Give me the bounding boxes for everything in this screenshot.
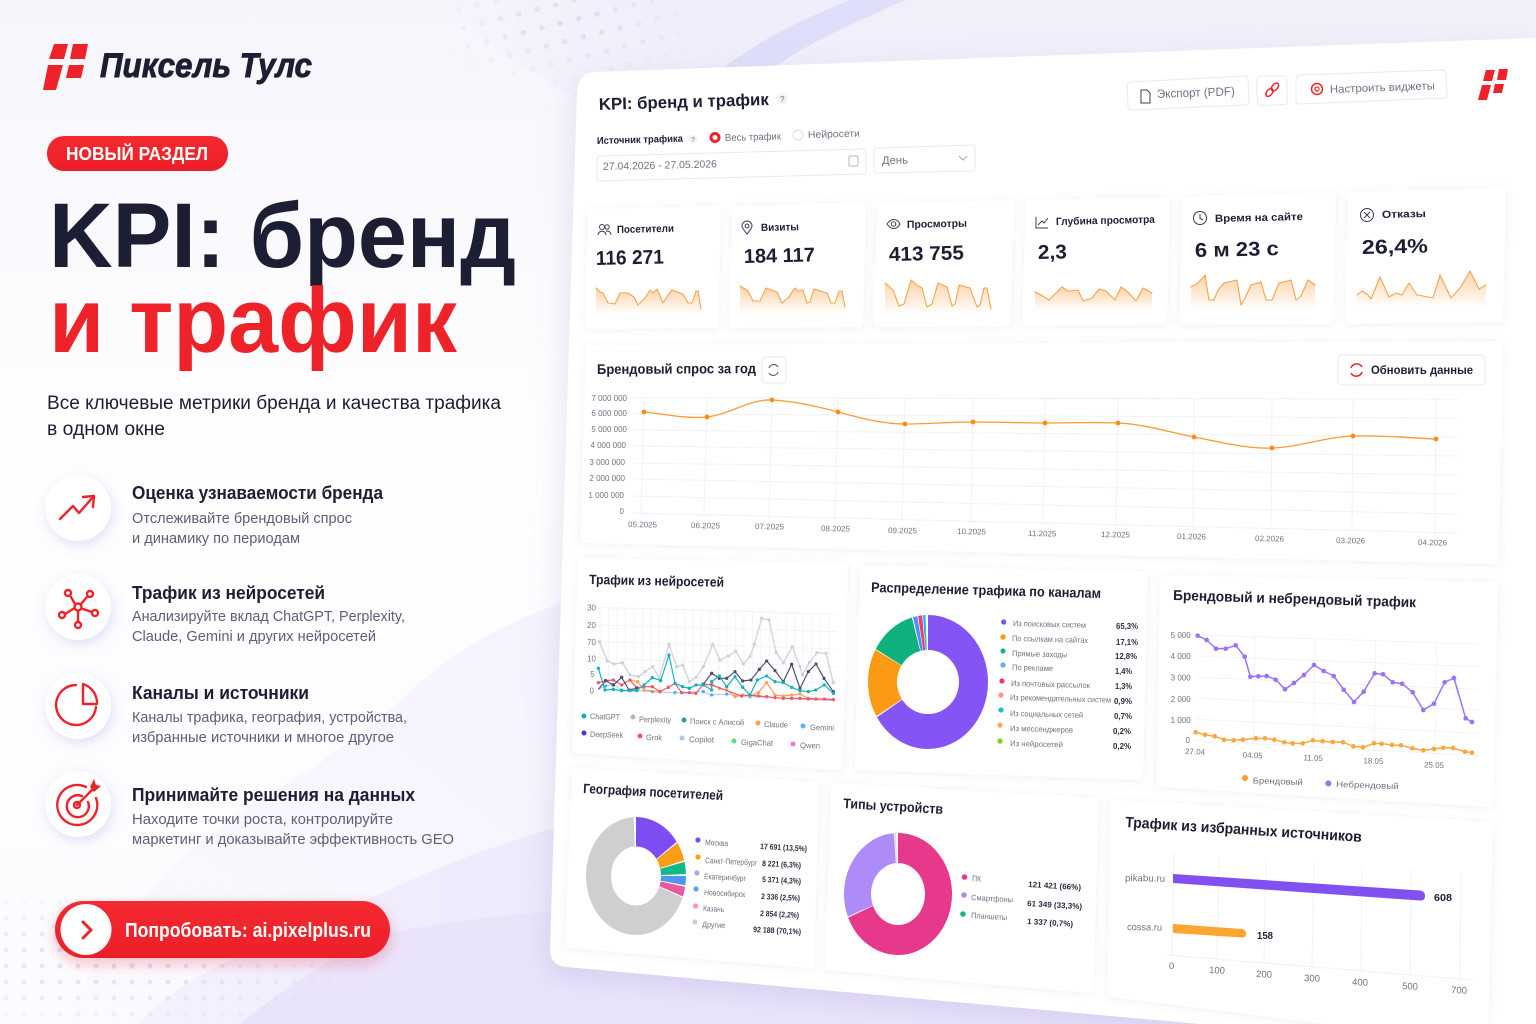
line chart: 1 000 000 (588, 491, 625, 500)
heading: Трафик из нейросетей (589, 572, 724, 590)
heading: География посетителей (583, 781, 723, 803)
legend: Copilot (689, 735, 715, 745)
bar chart: 700 (1451, 985, 1467, 997)
legend: Из мессенджеров (1010, 724, 1073, 735)
line chart: 6 000 000 (591, 409, 628, 418)
traffic source filters (597, 129, 975, 181)
KPI: visitors: 116 271 (596, 246, 664, 270)
line chart: 09.2025 (888, 526, 918, 536)
line chart: 04.05 (1243, 751, 1263, 760)
KPI: visitors (589, 210, 717, 325)
feature: brand awareness: Отслеживайте брендовый спрос (132, 510, 352, 527)
KPI: pageviews (877, 204, 1010, 323)
legend: Claude (764, 720, 789, 730)
KPI: bounces: 26,4% (1362, 236, 1428, 259)
line chart: 07.2025 (755, 522, 785, 532)
bar chart: 200 (1256, 969, 1272, 981)
line chart: 1 000 (1171, 716, 1191, 725)
KPI: view depth (1026, 201, 1166, 322)
line chart: 10 (587, 654, 597, 663)
icon: pie chart (45, 673, 111, 739)
title: и трафик (49, 270, 458, 372)
KPI: visitors: Посетители (617, 223, 674, 236)
panel: AI traffic (576, 562, 844, 766)
line chart: 0 (590, 686, 595, 695)
help icon: ? (780, 95, 785, 104)
bar chart: 400 (1352, 977, 1368, 989)
feature: AI traffic: Трафик из нейросетей (132, 583, 325, 603)
legend: 17,1% (1116, 638, 1138, 647)
line chart: 5 000 (1171, 631, 1191, 640)
legend: Из социальных сетей (1010, 709, 1083, 720)
line chart: 0 (620, 507, 625, 516)
traffic source filters: Источник трафика (597, 133, 683, 147)
line chart: 4 000 000 (590, 441, 627, 450)
feature: channels: избранные источники и многое другое (132, 729, 394, 746)
button: update data: Обновить данные (1371, 365, 1473, 377)
period select (874, 145, 975, 173)
bar chart: pikabu.ru (1125, 873, 1165, 885)
button: export: Экспорт (PDF) (1157, 84, 1235, 101)
line chart (1171, 631, 1479, 791)
icon: people (598, 224, 611, 235)
KPI: visits: 184 117 (744, 244, 815, 268)
sparkline (885, 280, 991, 314)
legend: Новосибирск (704, 888, 746, 899)
line chart: Брендовый (1253, 775, 1303, 787)
icon: eye (887, 220, 900, 228)
heading: Брендовый и небрендовый трафик (1173, 588, 1417, 611)
legend: Qwen (800, 741, 820, 750)
legend: Москва (705, 838, 729, 848)
icon: logo mark (43, 44, 88, 90)
legend: Смартфоны (971, 893, 1014, 905)
bar chart (1125, 853, 1473, 997)
bar chart: 500 (1402, 981, 1418, 993)
title (49, 185, 516, 372)
dashboard heading: KPI: бренд и трафик (599, 90, 770, 114)
legend: 92 188 (70,1%) (753, 925, 802, 936)
legend: ChatGPT (590, 712, 620, 722)
bar: cossa.ru (1173, 924, 1246, 938)
bar: pikabu.ru (1173, 874, 1425, 901)
KPI: pageviews: Просмотры (907, 218, 967, 231)
feature: data decisions: Принимайте решения на данных (132, 785, 415, 805)
donut chart (897, 648, 959, 716)
legend: 1,4% (1115, 667, 1132, 676)
legend: 12,8% (1115, 652, 1137, 661)
legend: GigaChat (741, 738, 774, 748)
KPI: bounces (1349, 192, 1502, 320)
sparkline (1191, 275, 1315, 310)
line chart: 3 000 (1171, 674, 1191, 683)
bar chart: 0 (1169, 961, 1174, 972)
line chart: 2 000 (1171, 695, 1191, 704)
KPI: view depth: 2,3 (1038, 241, 1067, 264)
icon: network (45, 574, 111, 640)
icon: pin (742, 221, 752, 234)
legend: Екатеринбург (704, 872, 746, 883)
logo (43, 44, 312, 90)
date range (597, 149, 866, 181)
line chart: 5 (590, 670, 595, 679)
line chart: 08.2025 (821, 524, 851, 534)
line chart: 12.2025 (1101, 530, 1131, 540)
icon: cross circle (1360, 208, 1374, 222)
KPI: visits (733, 207, 862, 324)
icon: trend arrow (45, 475, 111, 541)
legend: 0,2% (1113, 727, 1131, 736)
line chart: 70 (587, 638, 597, 647)
legend: Perplexity (639, 715, 671, 725)
icon: target (45, 771, 111, 837)
line chart: 05.2025 (628, 520, 658, 530)
heading: Брендовый спрос за год (597, 360, 756, 377)
button: link (1257, 75, 1288, 106)
legend: 2 336 (2,5%) (761, 892, 801, 903)
line chart (588, 394, 1458, 548)
legend: Прямые заходы (1012, 649, 1067, 659)
KPI: view depth: Глубина просмотра (1056, 214, 1155, 228)
button: export (1127, 76, 1249, 110)
feature: data decisions: Находите точки роста, контролируйте (132, 811, 393, 828)
feature: AI traffic: Анализируйте вклад ChatGPT, Perplexity, (132, 608, 405, 625)
legend: 0,7% (1114, 712, 1132, 721)
legend: ПК (972, 874, 982, 884)
legend (692, 837, 808, 936)
legend: 121 421 (66%) (1028, 880, 1082, 892)
button: try: Попробовать: ai.pixelplus.ru (125, 920, 371, 942)
line chart: 25.05 (1424, 760, 1445, 770)
traffic source filters: ? (691, 137, 695, 144)
button: update data (1338, 355, 1485, 385)
date range: 27.04.2026 - 27.05.2026 (603, 158, 717, 173)
heading: Распределение трафика по каналам (871, 579, 1101, 601)
button: configure widgets (1296, 70, 1447, 104)
legend: Из рекомендательных систем (1010, 693, 1111, 705)
line chart: 3 000 000 (589, 458, 626, 467)
legend: 2 854 (2,2%) (760, 909, 800, 920)
KPI: visits: Визиты (761, 221, 799, 234)
KPI: time on site: 6 м 23 с (1195, 238, 1279, 262)
legend: Gemini (810, 723, 834, 733)
legend: Казань (703, 904, 724, 914)
legend (582, 712, 834, 750)
legend: 0,2% (1113, 742, 1131, 751)
dashboard header (599, 69, 1508, 114)
line chart: 4 000 (1171, 652, 1191, 661)
legend: Поиск с Алисой (690, 717, 744, 727)
line chart: 18.05 (1363, 756, 1384, 766)
radio: all traffic: Весь трафик (725, 131, 782, 144)
legend: По ссылкам на сайтах (1012, 634, 1088, 645)
legend: 65,3% (1116, 622, 1138, 631)
title: KPI: бренд (49, 185, 516, 287)
panel: favorite sources (1111, 804, 1489, 1024)
legend: 1,3% (1115, 682, 1132, 691)
legend: DeepSeek (590, 730, 624, 740)
line chart: 20 (587, 621, 597, 630)
line chart: 10.2025 (957, 527, 987, 537)
subtitle: в одном окне (47, 419, 165, 440)
line chart: 0 (1186, 736, 1191, 745)
help icon (776, 94, 788, 104)
legend: 1 337 (0,7%) (1027, 917, 1074, 929)
radio: neural networks: Нейросети (808, 129, 860, 141)
feature: channels (45, 673, 407, 746)
panel: brand vs non-brand (1160, 579, 1494, 803)
feature: channels: Каналы трафика, география, устройства, (132, 709, 407, 726)
legend: 61 349 (33,3%) (1027, 899, 1083, 911)
bar chart: 100 (1209, 965, 1225, 977)
line chart: 2 000 000 (589, 474, 626, 483)
legend: 0,9% (1114, 697, 1132, 706)
legend: Другие (702, 920, 726, 930)
button: configure widgets: Настроить виджеты (1330, 80, 1435, 96)
panel: brand demand (584, 345, 1499, 560)
feature: brand awareness: и динамику по периодам (132, 530, 300, 547)
panel: geography (569, 772, 815, 964)
donut chart (611, 846, 661, 906)
line chart: 04.2026 (1418, 538, 1448, 548)
KPI: time on site: Время на сайте (1215, 211, 1303, 225)
bar chart: 608 (1434, 893, 1452, 904)
bar chart: 158 (1257, 931, 1273, 942)
icon: small logo (1478, 69, 1508, 100)
subtitle (47, 393, 501, 440)
line chart: 5 000 000 (591, 425, 628, 434)
feature: AI traffic (45, 574, 405, 645)
legend: 17 691 (13,5%) (760, 842, 808, 853)
feature: AI traffic: Claude, Gemini и других нейросетей (132, 628, 376, 645)
legend: Из почтовых рассылок (1011, 679, 1091, 690)
panel: channels (859, 569, 1144, 776)
refresh icon button (762, 357, 786, 383)
line chart: Небрендовый (1336, 779, 1399, 791)
heading: Типы устройств (843, 795, 944, 817)
legend (997, 619, 1138, 751)
subtitle: Все ключевые метрики бренда и качества трафика (47, 393, 501, 414)
period select: День (882, 155, 908, 167)
sparkline (740, 286, 845, 314)
legend: 5 371 (4,3%) (762, 875, 802, 886)
badge: new section (47, 136, 228, 171)
bar chart: cossa.ru (1127, 922, 1162, 934)
line chart: 02.2026 (1255, 534, 1285, 544)
legend: Санкт-Петербург (705, 856, 757, 868)
sparkline (1035, 287, 1152, 310)
legend: По рекламе (1012, 663, 1054, 673)
KPI: time on site (1183, 196, 1332, 321)
feature: data decisions (45, 771, 454, 848)
feature: data decisions: маркетинг и доказывайте эффективность GEO (132, 831, 454, 848)
line chart: 03.2026 (1336, 536, 1366, 546)
badge: new section: НОВЫЙ РАЗДЕЛ (66, 143, 208, 164)
bar chart: 300 (1304, 973, 1320, 985)
feature: brand awareness (45, 475, 384, 547)
KPI: bounces: Отказы (1382, 208, 1426, 221)
legend: Grok (646, 733, 663, 742)
brand name: Пиксель Тулс (100, 47, 312, 85)
line chart: 27.04 (1185, 747, 1206, 757)
line chart: 7 000 000 (591, 394, 628, 403)
panel: device types (829, 787, 1095, 989)
line chart: 11.2025 (1028, 529, 1057, 539)
legend (960, 874, 1083, 929)
icon: small chart (1036, 217, 1048, 228)
heading: Трафик из избранных источников (1125, 814, 1362, 846)
button: try (55, 901, 390, 958)
icon: clock (1194, 212, 1206, 224)
line chart: 11.05 (1303, 753, 1324, 763)
sparkline (1357, 271, 1486, 308)
sparkline (596, 288, 701, 314)
feature: channels: Каналы и источники (132, 683, 309, 703)
legend: Планшеты (971, 911, 1008, 922)
donut chart (871, 863, 925, 925)
KPI: pageviews: 413 755 (889, 242, 964, 266)
legend: 8 221 (6,3%) (762, 859, 802, 870)
feature: brand awareness: Оценка узнаваемости бренда (132, 483, 384, 503)
legend: Из поисковых систем (1013, 619, 1086, 630)
dashboard panel (550, 38, 1536, 1024)
line chart: 01.2026 (1177, 532, 1207, 542)
line chart: 30 (587, 604, 597, 613)
line chart: 06.2025 (691, 521, 721, 531)
legend: Из нейросетей (1010, 739, 1063, 749)
line chart (587, 604, 837, 701)
